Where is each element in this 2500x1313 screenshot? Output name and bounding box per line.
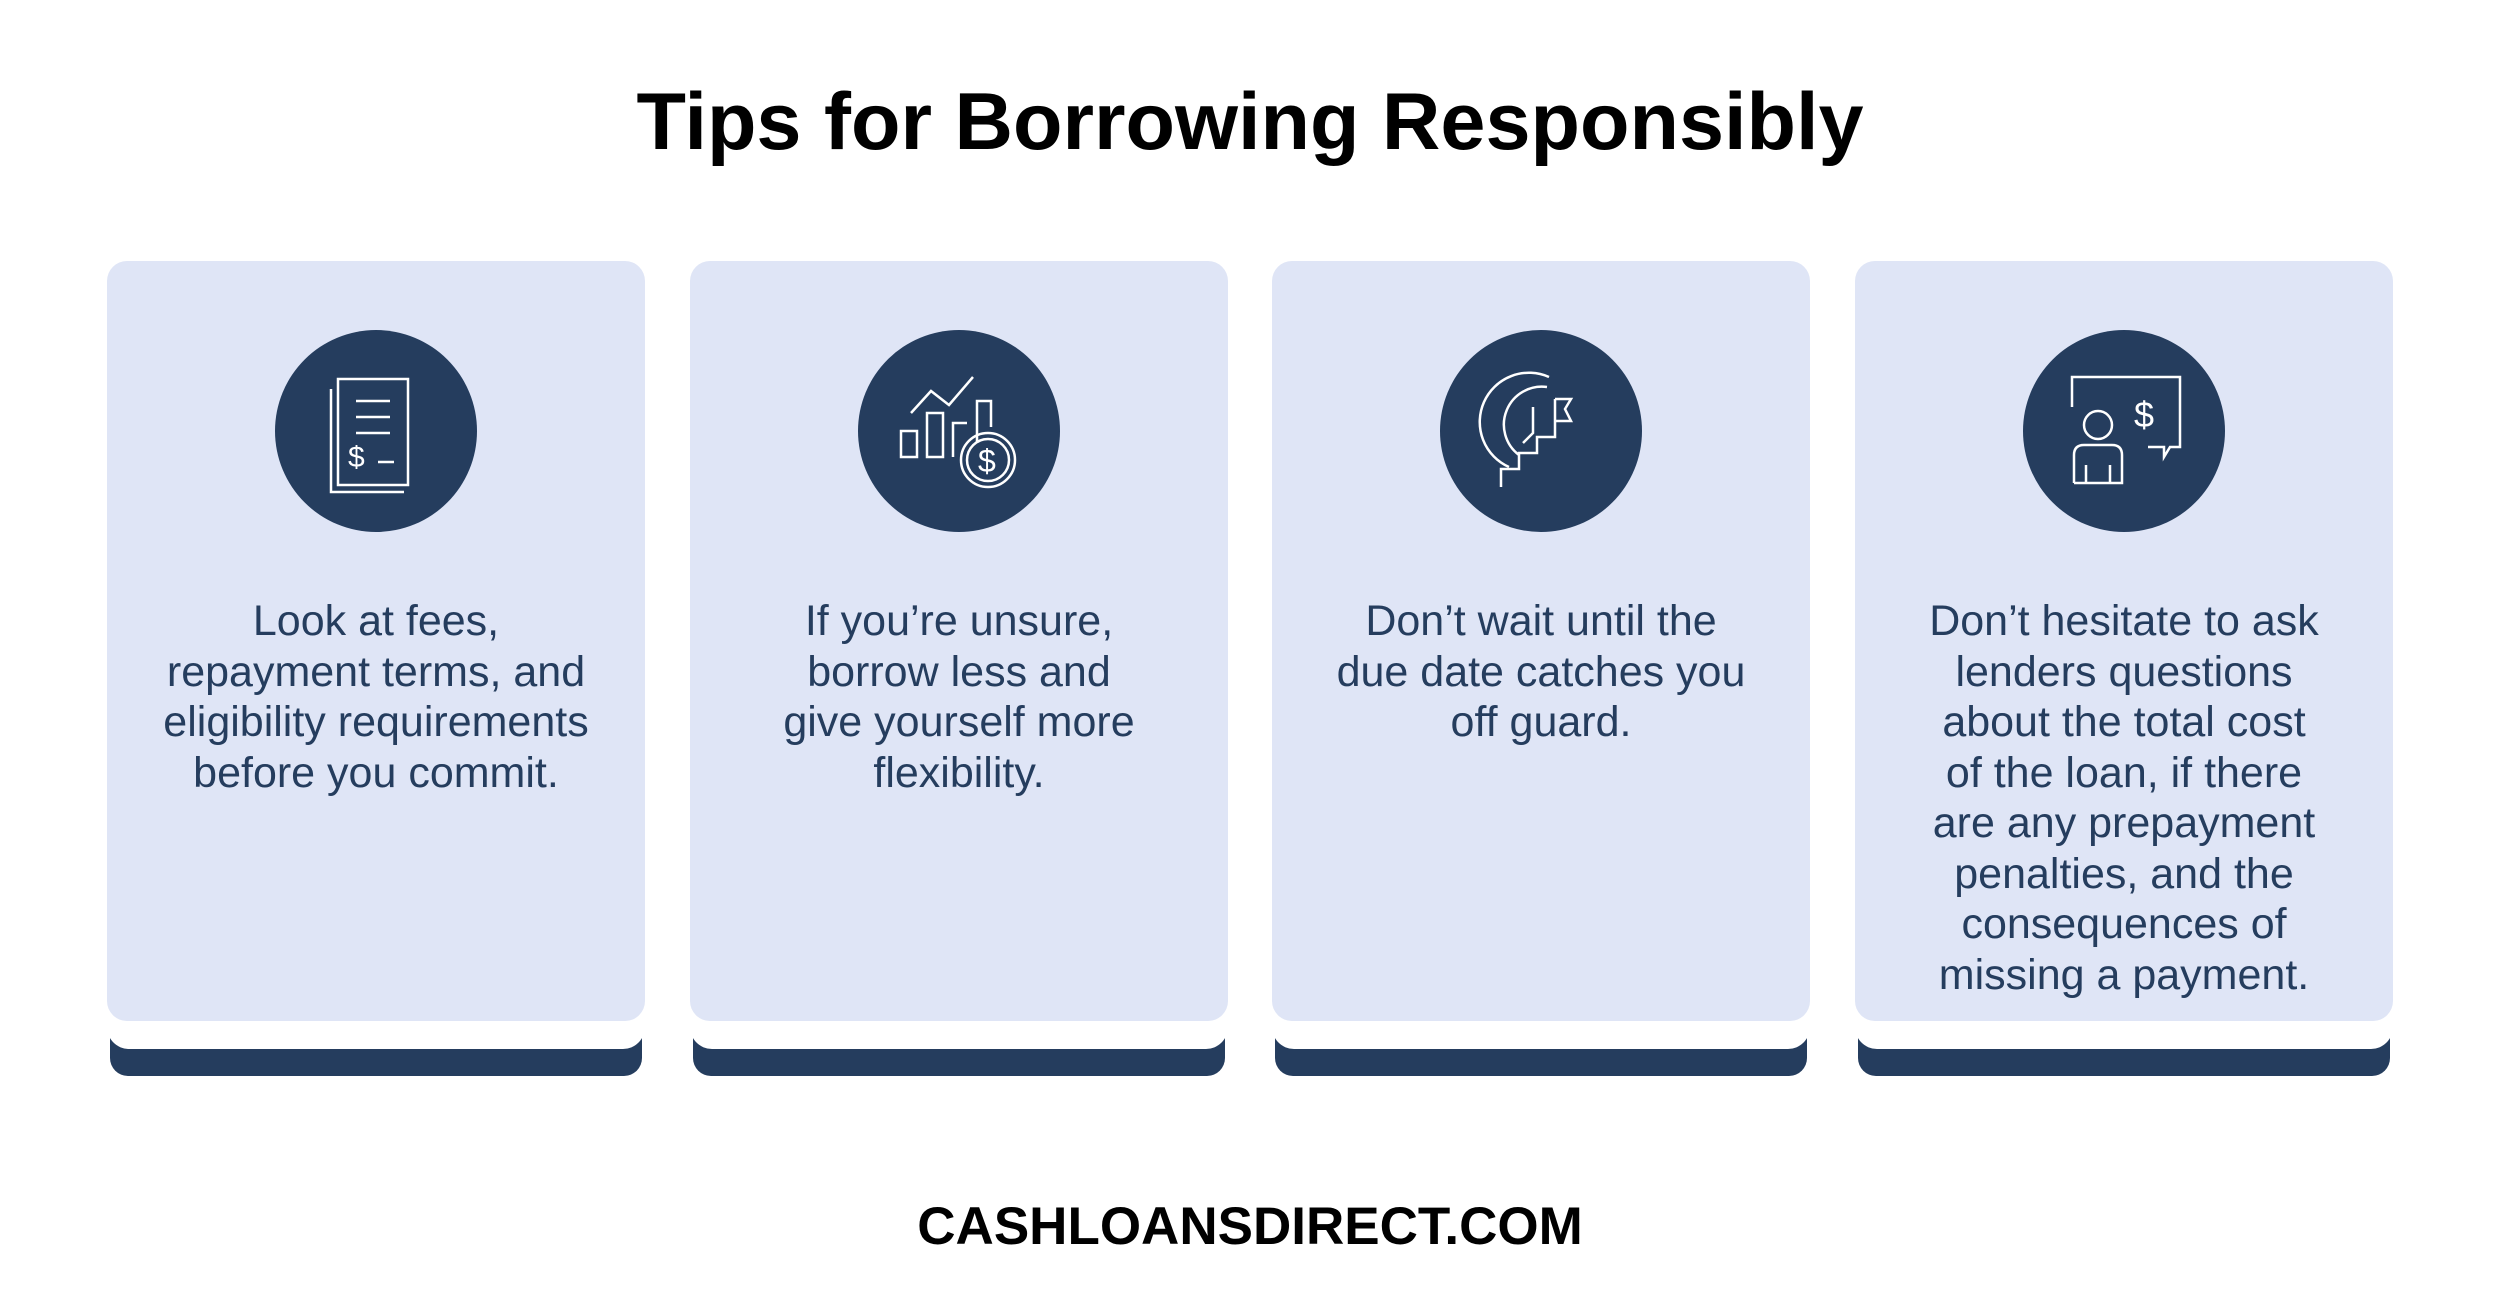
footer: CASHLOANSDIRECT.COM <box>917 1197 1583 1256</box>
panel: card 1 <box>107 261 645 1076</box>
panel: card 2 <box>690 261 1228 1076</box>
text block <box>783 597 1135 796</box>
text block: before you commit. <box>193 748 559 796</box>
text block: about the total cost <box>1942 698 2306 746</box>
panel: card 4 <box>1855 261 2393 1076</box>
text block: missing a payment. <box>1939 950 2309 998</box>
icon: document with dollar: $ <box>348 441 365 474</box>
icon: document with dollar <box>275 330 477 532</box>
title: Tips for Borrowing Responsibly <box>636 77 1864 167</box>
text block <box>1929 597 2319 998</box>
text block: penalties, and the <box>1954 850 2294 898</box>
text block <box>1337 597 1745 746</box>
text block: repayment terms, and <box>167 648 585 696</box>
text block: consequences of <box>1961 900 2287 948</box>
text block: Don’t wait until the <box>1365 597 1717 645</box>
icon: person with speech bubble <box>2023 330 2225 532</box>
text block: due date catches you <box>1337 648 1745 696</box>
icon: chart with coin <box>858 330 1060 532</box>
text block: eligibility requirements <box>163 698 589 746</box>
text block: If you’re unsure, <box>805 597 1113 645</box>
icon: clock with stairs and flag <box>1440 330 1642 532</box>
icon: chart with coin: $ <box>978 443 996 479</box>
text block: off guard. <box>1451 698 1631 746</box>
panel: card 3 <box>1272 261 1810 1076</box>
text block: Don’t hesitate to ask <box>1929 597 2319 645</box>
text block <box>163 597 589 796</box>
text block: of the loan, if there <box>1946 748 2302 796</box>
text block: give yourself more <box>783 698 1135 746</box>
text block: borrow less and <box>807 648 1111 696</box>
text block: lenders questions <box>1955 648 2293 696</box>
text block: flexibility. <box>873 748 1045 796</box>
text block: are any prepayment <box>1933 799 2315 847</box>
icon: person with speech bubble: $ <box>2134 394 2154 435</box>
text block: Look at fees, <box>253 597 499 645</box>
